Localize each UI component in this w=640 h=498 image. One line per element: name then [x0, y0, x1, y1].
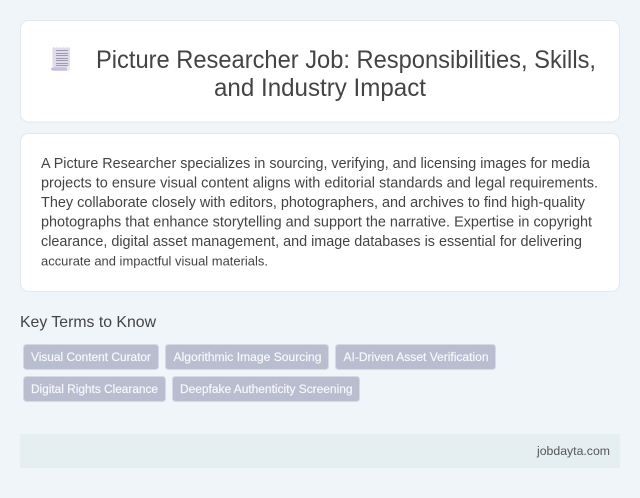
chip: Digital Rights Clearance	[24, 376, 166, 402]
chip: Deepfake Authenticity Screening: Deepfake Authenticity Screening	[180, 382, 353, 396]
chip: Algorithmic Image Sourcing	[166, 344, 328, 370]
chip: Visual Content Curator: Visual Content Curator	[31, 350, 151, 364]
panel: title card	[20, 20, 620, 122]
text block: description: clearance, digital asset management, and image databases is essential for delivering	[41, 234, 582, 250]
chip: Digital Rights Clearance: Digital Rights Clearance	[31, 382, 158, 396]
title: Picture Researcher Job: Responsibilities, Skills,	[96, 46, 596, 74]
chip: AI-Driven Asset Verification	[336, 344, 496, 370]
chip: Deepfake Authenticity Screening	[172, 376, 360, 402]
text block: description	[41, 156, 598, 268]
chip: Algorithmic Image Sourcing: Algorithmic Image Sourcing	[174, 350, 322, 364]
footer text: site name: jobdayta.com	[536, 444, 610, 458]
title: and Industry Impact	[214, 74, 426, 102]
chip: AI-Driven Asset Verification: AI-Driven Asset Verification	[344, 350, 489, 364]
footer bar	[20, 434, 620, 468]
title	[96, 46, 596, 102]
panel: description card	[20, 134, 620, 292]
text block: description: A Picture Researcher specializes in sourcing, verifying, and licensing images for media	[41, 156, 590, 172]
text block: description: projects to ensure visual content aligns with editorial standards and legal requirements.	[41, 176, 598, 192]
heading: key terms: Key Terms to Know	[20, 314, 156, 331]
chips: key terms	[24, 344, 496, 402]
icon: document scroll	[51, 47, 70, 71]
text block: description: They collaborate closely with editors, photographers, and archives to find high-quality	[41, 195, 586, 211]
text block: description: accurate and impactful visual materials.	[41, 254, 268, 268]
chip: Visual Content Curator	[24, 344, 158, 370]
text block: description: photographs that enhance storytelling and support the narrative. Expertise in copyright	[41, 214, 592, 230]
